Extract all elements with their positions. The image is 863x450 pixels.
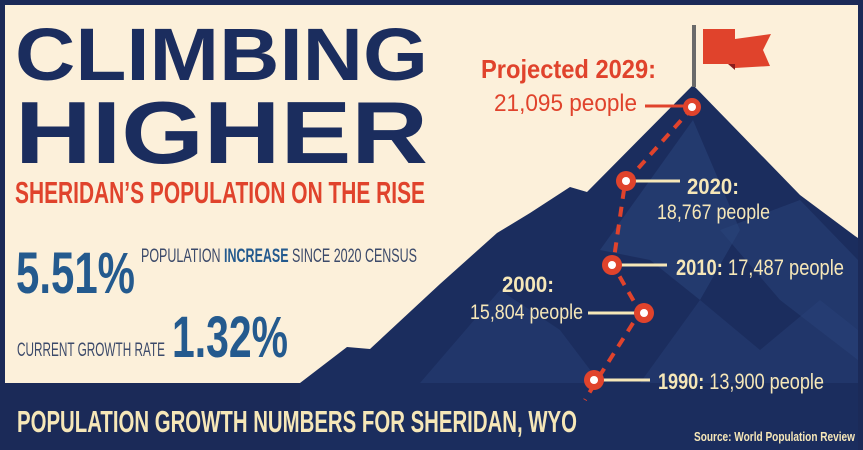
title: CLIMBING [15,13,428,96]
marker: 2010: 2010: 17,487 people [676,255,844,280]
dashed path [585,107,693,400]
marker: 1990 [584,369,824,394]
marker: 2000: 2000: [502,272,554,297]
mountain [300,85,858,450]
marker: 2029: Projected 2029: [481,54,656,84]
marker: 2020: 18,767 people [657,201,770,224]
stat: 5.51%: POPULATION INCREASE SINCE 2020 CENSUS [141,246,417,267]
stat: 1.32% [17,305,288,370]
stat: 5.51% [16,241,417,306]
marker: 2029: 21,095 people [494,90,637,117]
marker: 2020: 2020: [687,174,739,199]
title [15,13,428,182]
marker: 2010 [602,255,844,280]
stat: 1.32%: 1.32% [172,305,288,370]
subtitle: SHERIDAN’S POPULATION ON THE RISE [15,175,425,210]
stat: 5.51%: 5.51% [16,241,135,306]
marker: 2000: 15,804 people [470,301,583,324]
icon: flag [692,25,771,87]
title: HIGHER [15,83,428,182]
marker: 2020 [616,171,770,224]
marker: 2000 [470,272,654,324]
marker: 1990: 1990: 13,900 people [658,369,824,394]
footer heading: POPULATION GROWTH NUMBERS FOR SHERIDAN, WYO [17,404,577,439]
stat: 1.32%: CURRENT GROWTH RATE [17,340,165,361]
marker: 2029 [481,54,701,117]
